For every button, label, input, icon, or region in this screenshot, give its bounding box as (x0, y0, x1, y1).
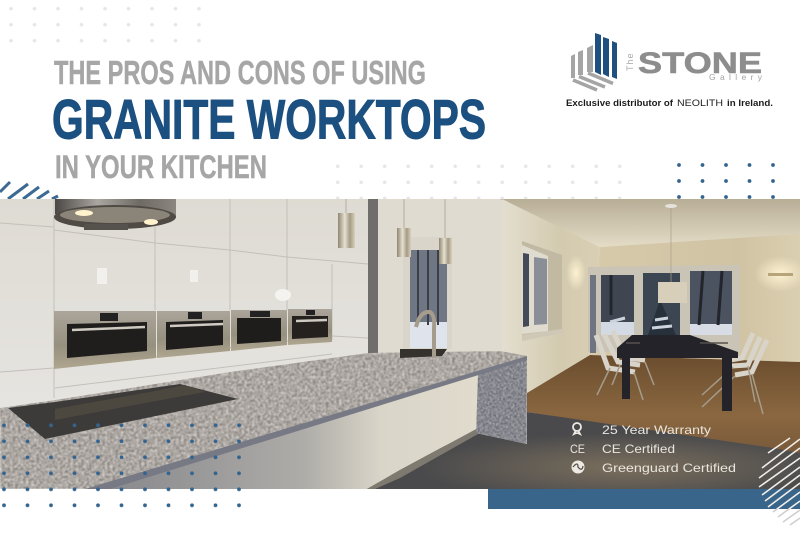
side wall (502, 199, 600, 400)
induction cooktop (8, 384, 238, 439)
certification: CE certified: CE (570, 442, 585, 456)
pendant lamp 2 (397, 199, 411, 257)
dot pattern: centre light (334, 163, 640, 199)
faucet (416, 312, 434, 358)
granite worktop (0, 351, 527, 489)
logo: The Stone Gallery (566, 33, 773, 108)
patio windows (588, 265, 740, 353)
dark tile floor (340, 412, 800, 489)
stripes: bottom right white (758, 438, 800, 509)
back door with snowy window (410, 250, 447, 348)
pendant chandelier (658, 204, 687, 303)
cabinet wall (0, 199, 368, 408)
logo word: Gallery: Gallery (709, 72, 763, 82)
dining table (617, 335, 738, 411)
title line: the pros and cons of using: THE PROS AND CONS OF USING (54, 54, 426, 91)
pendant lamp 3 (439, 199, 452, 264)
title line: granite worktops: GRANITE WORKTOPS (52, 88, 486, 150)
range hood (54, 199, 176, 230)
waterfall granite end (476, 358, 527, 444)
certification: 25 year warranty: 25 Year Warranty (602, 423, 711, 437)
dining chairs (596, 331, 767, 414)
wood floor (527, 355, 800, 455)
kitchen photo illustration (0, 199, 800, 489)
wall lights (568, 259, 800, 288)
certification: CE certified (570, 442, 675, 456)
distributor tagline: in Ireland. (727, 98, 773, 108)
dot pattern: bottom left blue (0, 422, 244, 510)
white wall (378, 199, 502, 353)
certification: CE certified: CE Certified (602, 442, 675, 456)
distributor tagline: Exclusive distributor of (566, 98, 674, 108)
dot pattern: top right blue (676, 162, 793, 199)
built-in ovens (54, 309, 332, 369)
distributor tagline (566, 98, 773, 108)
ceiling (500, 199, 800, 247)
back wall (590, 234, 800, 362)
worktop front edge (85, 356, 527, 489)
side window (522, 241, 563, 341)
distributor tagline: NEOLITH (677, 98, 723, 108)
blue bar (488, 489, 800, 509)
base cabinet (90, 370, 478, 489)
stripes: bottom right grey (772, 509, 800, 526)
certifications list (570, 423, 736, 475)
dot pattern: top left (8, 6, 219, 54)
certification: Greenguard certified (572, 460, 736, 475)
title (52, 54, 486, 185)
logo word: Stone: STONE (638, 47, 762, 80)
certification: Greenguard certified: Greenguard Certified (602, 461, 736, 475)
stripes: top left (0, 182, 58, 199)
sink (400, 349, 447, 358)
grey column (368, 199, 378, 357)
title line: in your kitchen: IN YOUR KITCHEN (55, 149, 267, 185)
logo mark (571, 33, 617, 90)
pendant lamp 1 (338, 199, 355, 248)
logo word: The: The (625, 52, 635, 71)
certification: 25 year warranty (572, 423, 711, 437)
